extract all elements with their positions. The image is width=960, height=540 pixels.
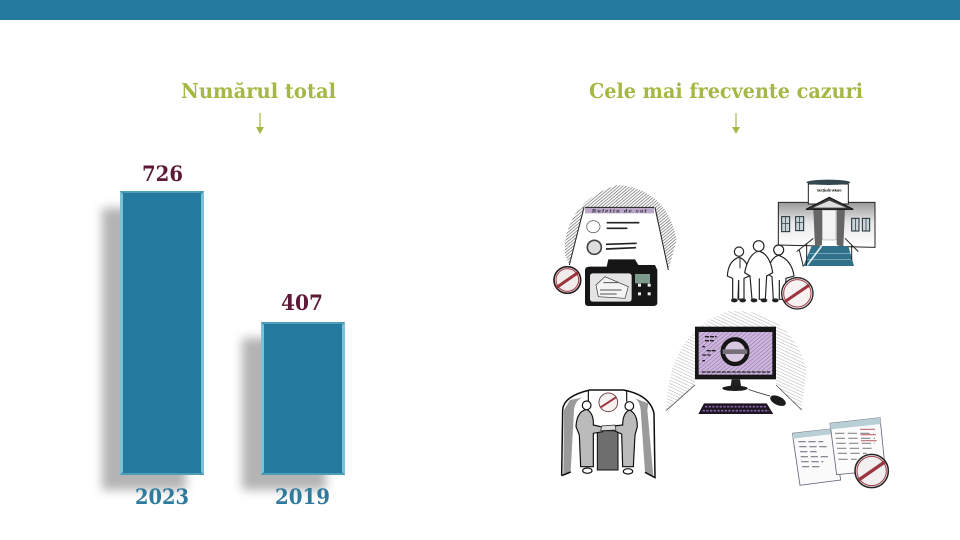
icon: prohibition mark [554,267,581,293]
icon: ballot and camera: Buletin de vot [591,208,648,214]
icon: prohibition mark [599,393,618,412]
icon: prohibition mark [782,278,813,309]
icon: voter lists [792,418,888,488]
icon: polling station and voters [727,180,875,309]
heading: most frequent cases: Cele mai frecvente cazuri [589,79,863,103]
icon: ballot and camera [554,185,677,306]
bar chart [102,162,345,510]
value 726: 726 [142,162,183,187]
arrow: most frequent cases [732,113,740,134]
heading: total number: Numărul total [181,79,336,103]
icon: prohibition mark [855,454,888,488]
bar 2019 [242,322,345,490]
arrow: total number [256,113,264,134]
icon: polling station and voters: Secția de votare [817,189,842,193]
label 2023: 2023 [135,485,189,510]
top band [0,0,960,20]
label 2019: 2019 [275,485,330,510]
bar 2023 [102,191,204,490]
value 407: 407 [281,291,323,316]
icon: voting booth with two people [562,390,655,478]
icon: computer with blocked page [666,311,807,414]
